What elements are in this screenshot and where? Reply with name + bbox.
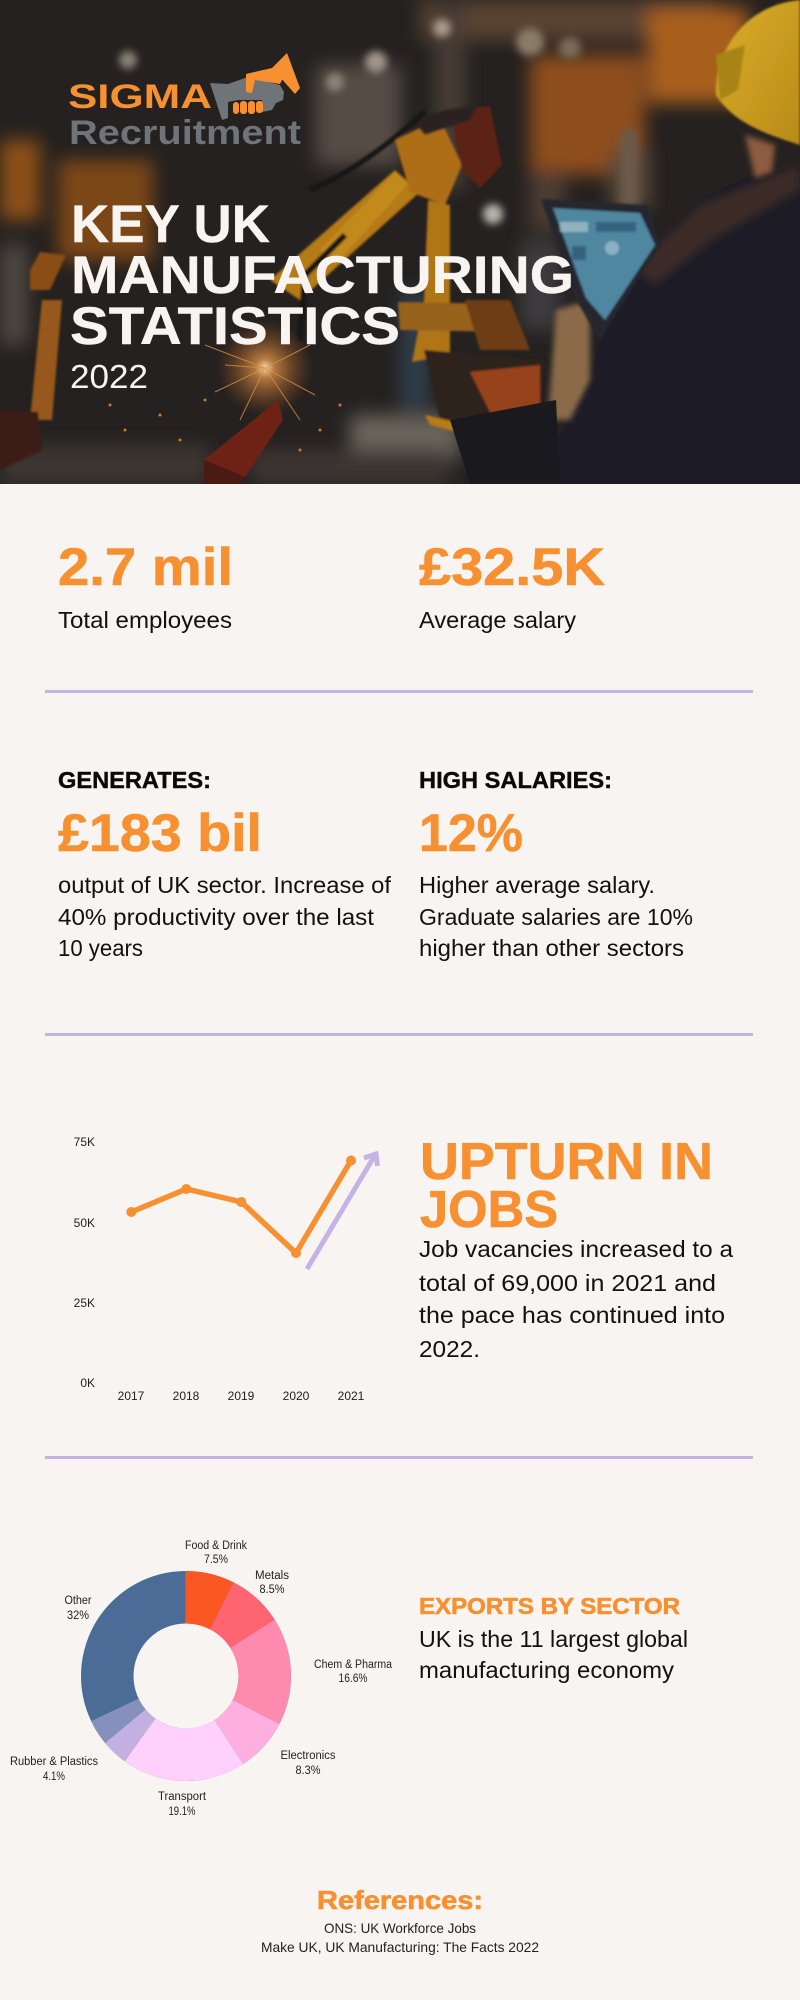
hero panel: factory photo backdrop: [0, 0, 800, 485]
stat: high salaries: 12%: [419, 804, 523, 863]
stat: total employees: Total employees: [58, 607, 232, 633]
stat: generates: [58, 767, 391, 961]
donut labels: Rubber & Plastics: [10, 1756, 98, 1768]
text: job vacancies: total of 69,000 in 2021 and: [419, 1270, 716, 1296]
heading: upturn in jobs: JOBS: [420, 1181, 558, 1239]
main robot arm: [270, 105, 545, 442]
weld spark: [108, 320, 342, 484]
y axis labels: [74, 1135, 95, 1390]
line chart: job vacancies: [74, 1135, 378, 1403]
tablet: [541, 199, 660, 340]
donut chart: exports by sector: [10, 1540, 393, 1818]
donut labels: [10, 1540, 393, 1818]
title: [70, 195, 574, 356]
stat: total employees: [58, 538, 233, 633]
donut labels: Metals: [255, 1570, 289, 1582]
hero panel: robot arms, tablet and worker: [0, 0, 800, 484]
text: UK ranking: UK is the 11 largest global: [419, 1626, 688, 1652]
stat: total employees: 2.7 mil: [58, 538, 233, 597]
references heading: References:: [317, 1885, 483, 1915]
title: STATISTICS: [70, 297, 400, 356]
donut labels: Food & Drink: [185, 1540, 247, 1552]
text: UK ranking: manufacturing economy: [419, 1657, 674, 1683]
stat: high salaries: [419, 767, 693, 961]
references list: Make UK, UK Manufacturing: The Facts 2022: [261, 1939, 539, 1955]
y axis labels: 50K: [74, 1216, 95, 1230]
text: job vacancies: Job vacancies increased to a: [419, 1236, 734, 1262]
title: MANUFACTURING: [71, 246, 574, 305]
donut labels: Chem & Pharma: [314, 1659, 393, 1671]
stat: generates: GENERATES:: [58, 767, 211, 793]
y axis labels: 0K: [80, 1376, 95, 1390]
y axis labels: 75K: [74, 1135, 95, 1149]
x axis labels: 2020: [283, 1389, 310, 1403]
title year: 2022: [70, 358, 148, 395]
data line: [126, 1156, 356, 1258]
stat: high salaries: Graduate salaries are 10%: [419, 904, 693, 930]
x axis labels: 2017: [118, 1389, 145, 1403]
stat: generates: 40% productivity over the last: [58, 904, 374, 930]
heading: exports by sector: EXPORTS BY SECTOR: [419, 1593, 680, 1619]
text: job vacancies: 2022.: [419, 1336, 480, 1362]
text: UK ranking: [419, 1626, 688, 1683]
x axis labels: 2019: [228, 1389, 255, 1403]
donut labels: 8.5%: [260, 1584, 284, 1596]
donut labels: 16.6%: [338, 1673, 368, 1685]
donut labels: 7.5%: [204, 1554, 228, 1566]
arrow: upward trend: [307, 1154, 378, 1269]
donut labels: 8.3%: [296, 1765, 320, 1777]
stat: generates: output of UK sector. Increase of: [58, 872, 391, 898]
heading: upturn in jobs: UPTURN IN: [420, 1133, 713, 1191]
donut labels: 19.1%: [168, 1806, 196, 1818]
donut labels: Transport: [158, 1791, 207, 1803]
heading: upturn in jobs: [420, 1133, 713, 1239]
title: KEY UK: [71, 195, 270, 254]
donut labels: 32%: [67, 1610, 89, 1622]
references list: [261, 1920, 539, 1955]
x axis labels: [118, 1389, 365, 1403]
stat: high salaries: Higher average salary.: [419, 872, 655, 898]
logo wordmark: Sigma: SIGMA: [68, 78, 212, 116]
worker: [450, 0, 800, 484]
donut labels: Other: [64, 1595, 92, 1607]
x axis labels: 2021: [338, 1389, 365, 1403]
donut labels: Electronics: [280, 1750, 336, 1762]
stat: generates: £183 bil: [58, 804, 262, 863]
stat: average salary: [419, 538, 605, 633]
stat: high salaries: higher than other sectors: [419, 935, 684, 961]
text: job vacancies: the pace has continued into: [419, 1302, 725, 1328]
stat: high salaries: HIGH SALARIES:: [419, 767, 612, 793]
stat: average salary: £32.5K: [419, 538, 605, 597]
x axis labels: 2018: [173, 1389, 200, 1403]
y axis labels: 25K: [74, 1296, 95, 1310]
stat: generates: 10 years: [58, 935, 143, 961]
stat: average salary: Average salary: [419, 607, 576, 633]
logo: [68, 53, 301, 152]
donut labels: 4.1%: [43, 1771, 65, 1783]
icon: handshake: [210, 53, 300, 120]
left robot arm: [0, 252, 66, 470]
references list: ONS: UK Workforce Jobs: [324, 1920, 476, 1936]
text: job vacancies: [419, 1236, 734, 1362]
logo wordmark: Recruitment: Recruitment: [69, 114, 301, 152]
